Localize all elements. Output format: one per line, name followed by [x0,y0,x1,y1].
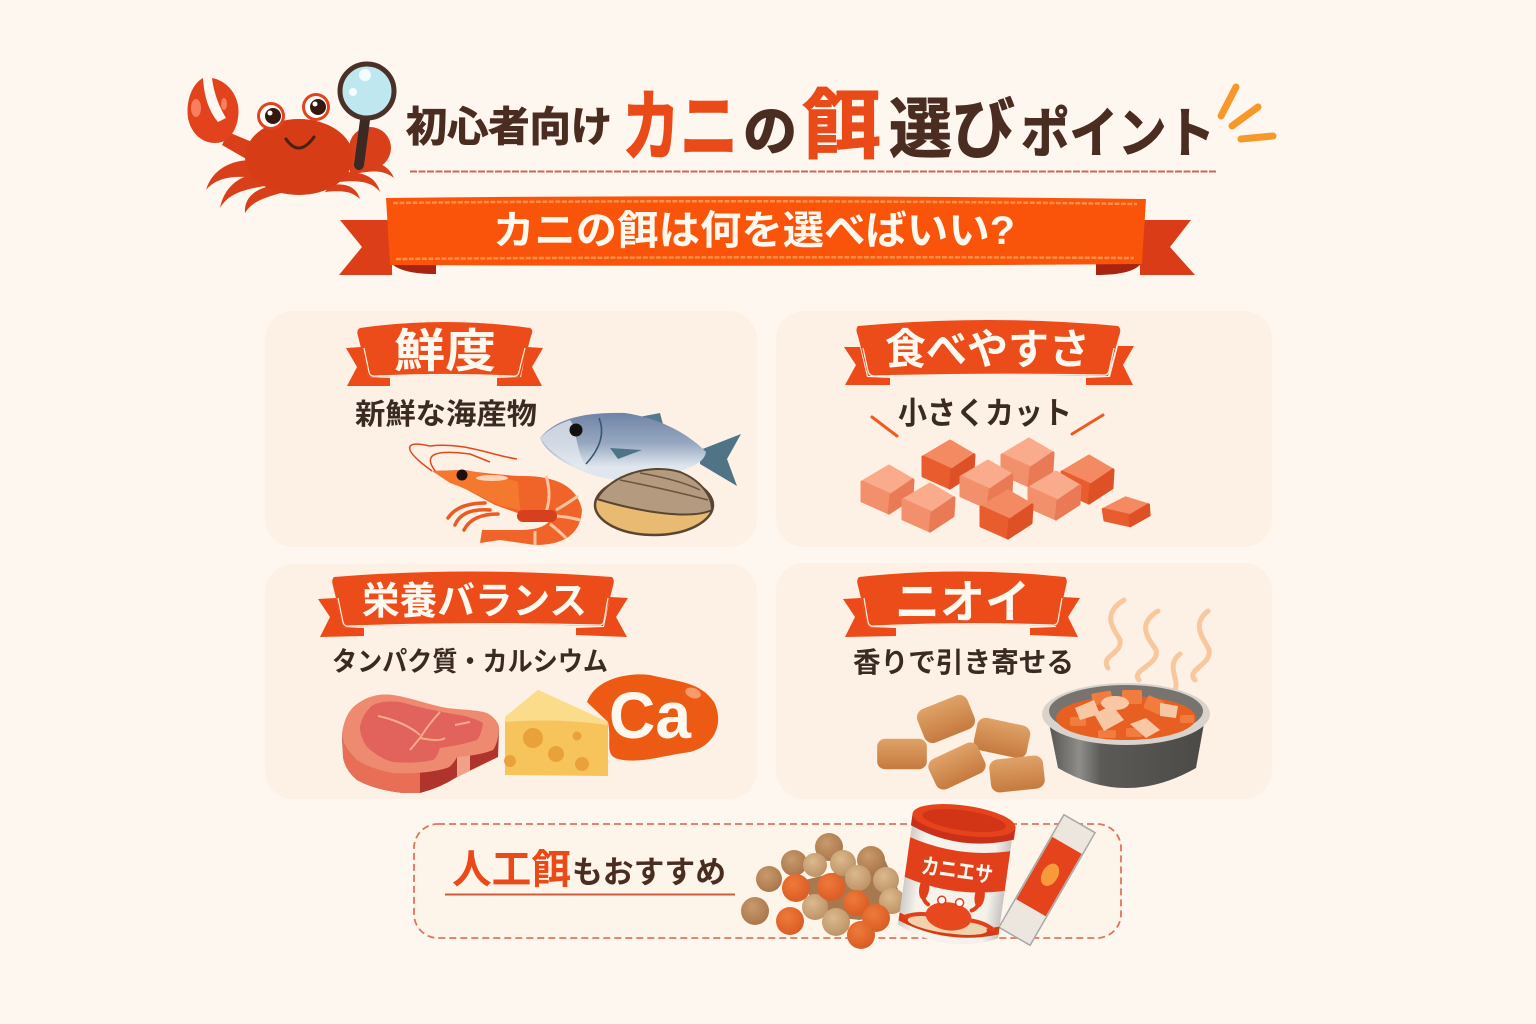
banner: ease of eating [844,320,1134,385]
icon: meat [342,695,499,793]
title: ポイント [1021,104,1215,164]
banner: nutrition balance: 栄養バランス [362,581,587,623]
text: fresh seafood: 新鮮な海産物 [355,398,537,431]
subtitle ribbon [339,196,1195,275]
icon: bait can [895,798,1018,951]
title [406,83,1215,171]
banner: nutrition balance [318,572,628,637]
banner: freshness: 鮮度 [394,325,496,377]
title: 餌 [802,84,881,169]
title: の [743,102,797,162]
accent ticks [872,415,1103,436]
icon: food bowl [1042,683,1210,788]
icon: scented kibble [877,692,1046,793]
icon: calcium blob: Ca [609,678,692,752]
icon: crab on can [903,876,999,940]
can label: カニエサ [920,853,994,888]
icon: pellets [741,833,905,949]
title: 初心者向け [406,104,612,150]
title: カニ [622,83,738,171]
icon: cut bait cubes [862,439,1152,538]
title: 選び [889,92,1015,166]
mascot crab with magnifying glass [188,64,394,213]
icon: steam [1106,600,1209,694]
text: artificial bait recommended: もおすすめ [572,855,726,890]
panel: freshness [265,311,757,547]
text: artificial bait recommended [452,848,726,892]
icon: bait stick pack [999,815,1095,945]
panel: nutrition balance [265,564,757,799]
panel: artificial bait [414,798,1121,951]
icon: shrimp [410,444,582,545]
subtitle text: カニの餌は何を選べばいい? [493,209,1015,253]
icon: clam [595,469,713,535]
text: artificial bait recommended: 人工餌 [452,848,571,892]
sparkle accent lines [1221,87,1273,139]
banner: freshness [346,322,543,386]
banner: ease of eating: 食べやすさ [885,326,1090,373]
text: cut small: 小さくカット [898,396,1072,431]
banner: smell: ニオイ [895,576,1030,628]
banner: smell [843,572,1080,637]
icon: cheese [504,690,608,776]
panel: smell [776,563,1272,799]
icon: calcium blob [587,674,718,761]
panel: ease of eating [776,311,1272,547]
text: attract with scent: 香りで引き寄せる [853,647,1074,678]
text: protein and calcium: タンパク質・カルシウム [332,647,608,677]
icon: fish [540,413,741,486]
